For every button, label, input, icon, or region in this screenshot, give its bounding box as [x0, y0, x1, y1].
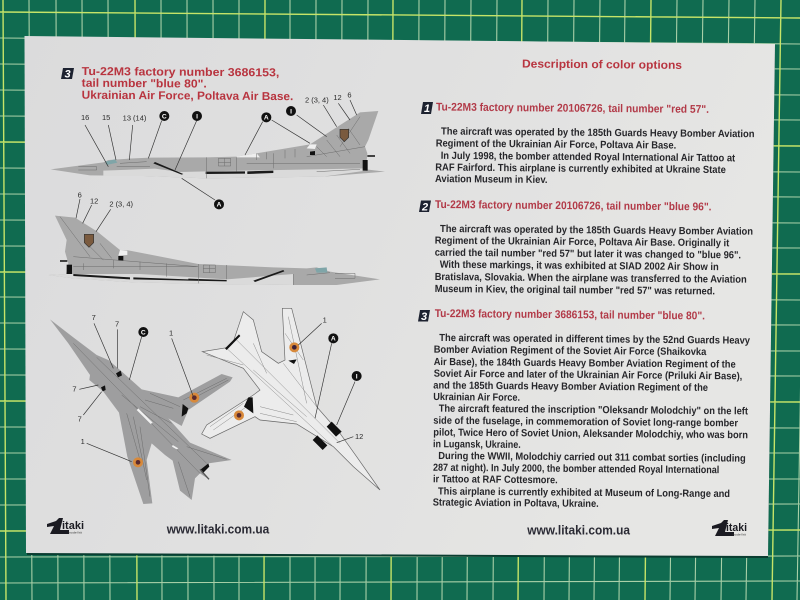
logo: Litaki left: [47, 518, 84, 534]
aircraft: top view grey: [50, 319, 233, 504]
callouts: side view left: A: [264, 115, 269, 122]
badge: number 3: 3: [421, 311, 427, 323]
text: option 3 description: During the WWII, Molodchiy carried out 311 combat sorties (including: [438, 451, 746, 465]
text: option 3 description: and the 185th Guards Heavy Bomber Aviation Regiment of the: [433, 381, 708, 394]
text: option 2 description: The aircraft was operated by the 185th Guards Heavy Bomber Aviation: [440, 224, 753, 238]
text: option 1 description: In July 1998, the bomber attended Royal International Air Tattoo at: [441, 151, 736, 164]
text: option 1 description: RAF Fairford. This airplane is currently exhibited at Ukraine State: [435, 163, 726, 176]
callouts: side view left: 13 (14): [123, 113, 147, 122]
callouts: side view right: [76, 191, 134, 232]
text: option 3 description: Bomber Aviation Regiment of the Soviet Air Force (Shaikovka: [434, 345, 707, 358]
heading: description of color options: Description of color options: [522, 59, 682, 72]
callouts: side view left: [81, 90, 357, 209]
callouts: side view right: 2 (3, 4): [109, 200, 134, 209]
heading: option 2: Tu-22M3 factory number 20106726, tail number "blue 96".: [435, 199, 712, 213]
badge: number 3: [418, 310, 430, 323]
text: option 3 description: side of the fuselage, in commemoration of Soviet long-range bomber: [433, 416, 738, 429]
text: option 1 description: The aircraft was operated by the 185th Guards Heavy Bomber Aviation: [441, 127, 755, 140]
text: option 2 description: Bratislava, Slovakia. When the airplane was transferred to the Aviation: [435, 272, 747, 286]
text: option 1 description: [435, 127, 755, 186]
callouts: side view right: 12: [90, 196, 98, 205]
callouts: side view left: 16: [81, 113, 89, 122]
heading: option 1: Tu-22M3 factory number 20106726, tail number "red 57".: [436, 102, 709, 116]
text: option 3 description: Soviet Air Force and later of the Ukrainian Air Force (Priluki Air Base),: [434, 369, 742, 382]
title text: tail number "blue 80".: [82, 78, 207, 91]
callouts: side view left: 2 (3, 4): [305, 96, 329, 105]
text: option 3 description: in Lugansk, Ukraine.: [433, 439, 521, 451]
url right: www.litaki.com.ua: [526, 522, 631, 538]
text: option 2 description: With these markings, it was exhibited at SIAD 2002 Air Show in: [440, 260, 719, 273]
callouts: side view left: I: [196, 113, 198, 120]
callouts: side view left: 12: [333, 93, 342, 102]
emblem: trident: [84, 234, 94, 247]
callouts: plan views: A: [331, 336, 336, 343]
text: option 3 description: Air Base), the 184th Guards Heavy Bomber Aviation Regiment of the: [434, 357, 736, 371]
callouts: plan views: 7: [92, 313, 96, 322]
aircraft: right side view: [48, 216, 380, 285]
emblem: trident: [340, 129, 349, 142]
callouts: plan views: 1: [169, 329, 173, 338]
logo: Litaki left: itaki: [62, 520, 84, 532]
title text: [82, 66, 293, 103]
text: option 3 description: 287 at night). In July 2000, the bomber attended Royal International: [433, 463, 719, 476]
logo: Litaki right: [712, 520, 747, 536]
callouts: side view left: I: [290, 108, 292, 115]
badge: number 1: 1: [424, 103, 430, 115]
title text: Tu-22M3 factory number 3686153,: [82, 66, 279, 79]
text: option 3 description: The aircraft featured the inscription "Oleksandr Molodchiy" on the left: [439, 404, 749, 417]
heading: option 3: Tu-22M3 factory number 3686153, tail number "blue 80".: [435, 308, 705, 322]
logo: Litaki left: model kit: [68, 530, 82, 534]
text: option 3 description: The aircraft was operated in different times by the 52nd Guards Heavy: [439, 333, 750, 347]
callouts: plan views: 7: [115, 320, 119, 329]
roundels: [234, 342, 299, 420]
callouts: side view left: 6: [347, 90, 352, 99]
badge: number 3: [61, 68, 74, 80]
callouts: plan views: 1: [81, 437, 85, 446]
logo: Litaki right: itaki: [726, 522, 747, 534]
text: option 3 description: Strategic Aviation in Poltava, Ukraine.: [433, 498, 599, 510]
callouts: plan views: 1: [323, 315, 327, 324]
callouts: plan views: [72, 313, 363, 462]
callouts: side view left: A: [217, 202, 222, 209]
callouts: plan views: I: [356, 373, 358, 380]
callouts: side view left: 15: [102, 113, 110, 122]
callouts: plan views: 12: [355, 432, 363, 441]
callouts: side view right: 6: [78, 191, 82, 200]
text: option 3 description: [433, 333, 750, 510]
callouts: plan views: C: [141, 329, 146, 336]
roundels: [133, 393, 199, 467]
panel: option 1: [421, 102, 755, 186]
badge: number 2: [419, 200, 431, 214]
text: option 3 description: ir Tattoo at RAF Cottesmore.: [433, 474, 558, 486]
text: option 3 description: pilot, Twice Hero of Soviet Union, Aleksander Molodchiy, who was born: [433, 428, 748, 441]
url left: www.litaki.com.ua: [166, 522, 270, 536]
badge: number 3: 3: [64, 68, 71, 80]
panel: option 2: [419, 199, 753, 297]
text: option 1 description: Regiment of the Ukrainian Air Force, Poltava Air Base.: [436, 139, 676, 152]
text: option 3 description: Ukrainian Air Force.: [433, 392, 520, 404]
text: option 1 description: Aviation Museum in Kiev.: [435, 174, 548, 186]
callouts: plan views: 7: [78, 414, 82, 423]
title text: Ukrainian Air Force, Poltava Air Base.: [82, 90, 293, 103]
callouts: side view left: C: [162, 113, 167, 120]
aircraft: left side view: [51, 111, 385, 178]
logo: Litaki right: model kit: [732, 532, 746, 536]
text: option 3 description: This airplane is currently exhibited at Museum of Long-Range and: [438, 487, 730, 500]
aircraft: bottom view white: [202, 308, 380, 490]
text: option 2 description: Regiment of the Ukrainian Air Force, Poltava Air Base. Originally it: [435, 236, 730, 249]
text: option 2 description: carried the tail number "red 57" but later it was changed to "blue 96".: [435, 248, 741, 261]
text: option 2 description: Museum in Kiev, the original tail number "red 57" was returned.: [435, 284, 715, 297]
text: option 2 description: [435, 224, 753, 297]
callouts: plan views: 7: [72, 385, 77, 394]
panel: option 3: [418, 308, 750, 510]
badge: number 2: 2: [421, 202, 428, 214]
panel: left title block: [61, 66, 293, 103]
badge: number 1: [421, 102, 433, 115]
